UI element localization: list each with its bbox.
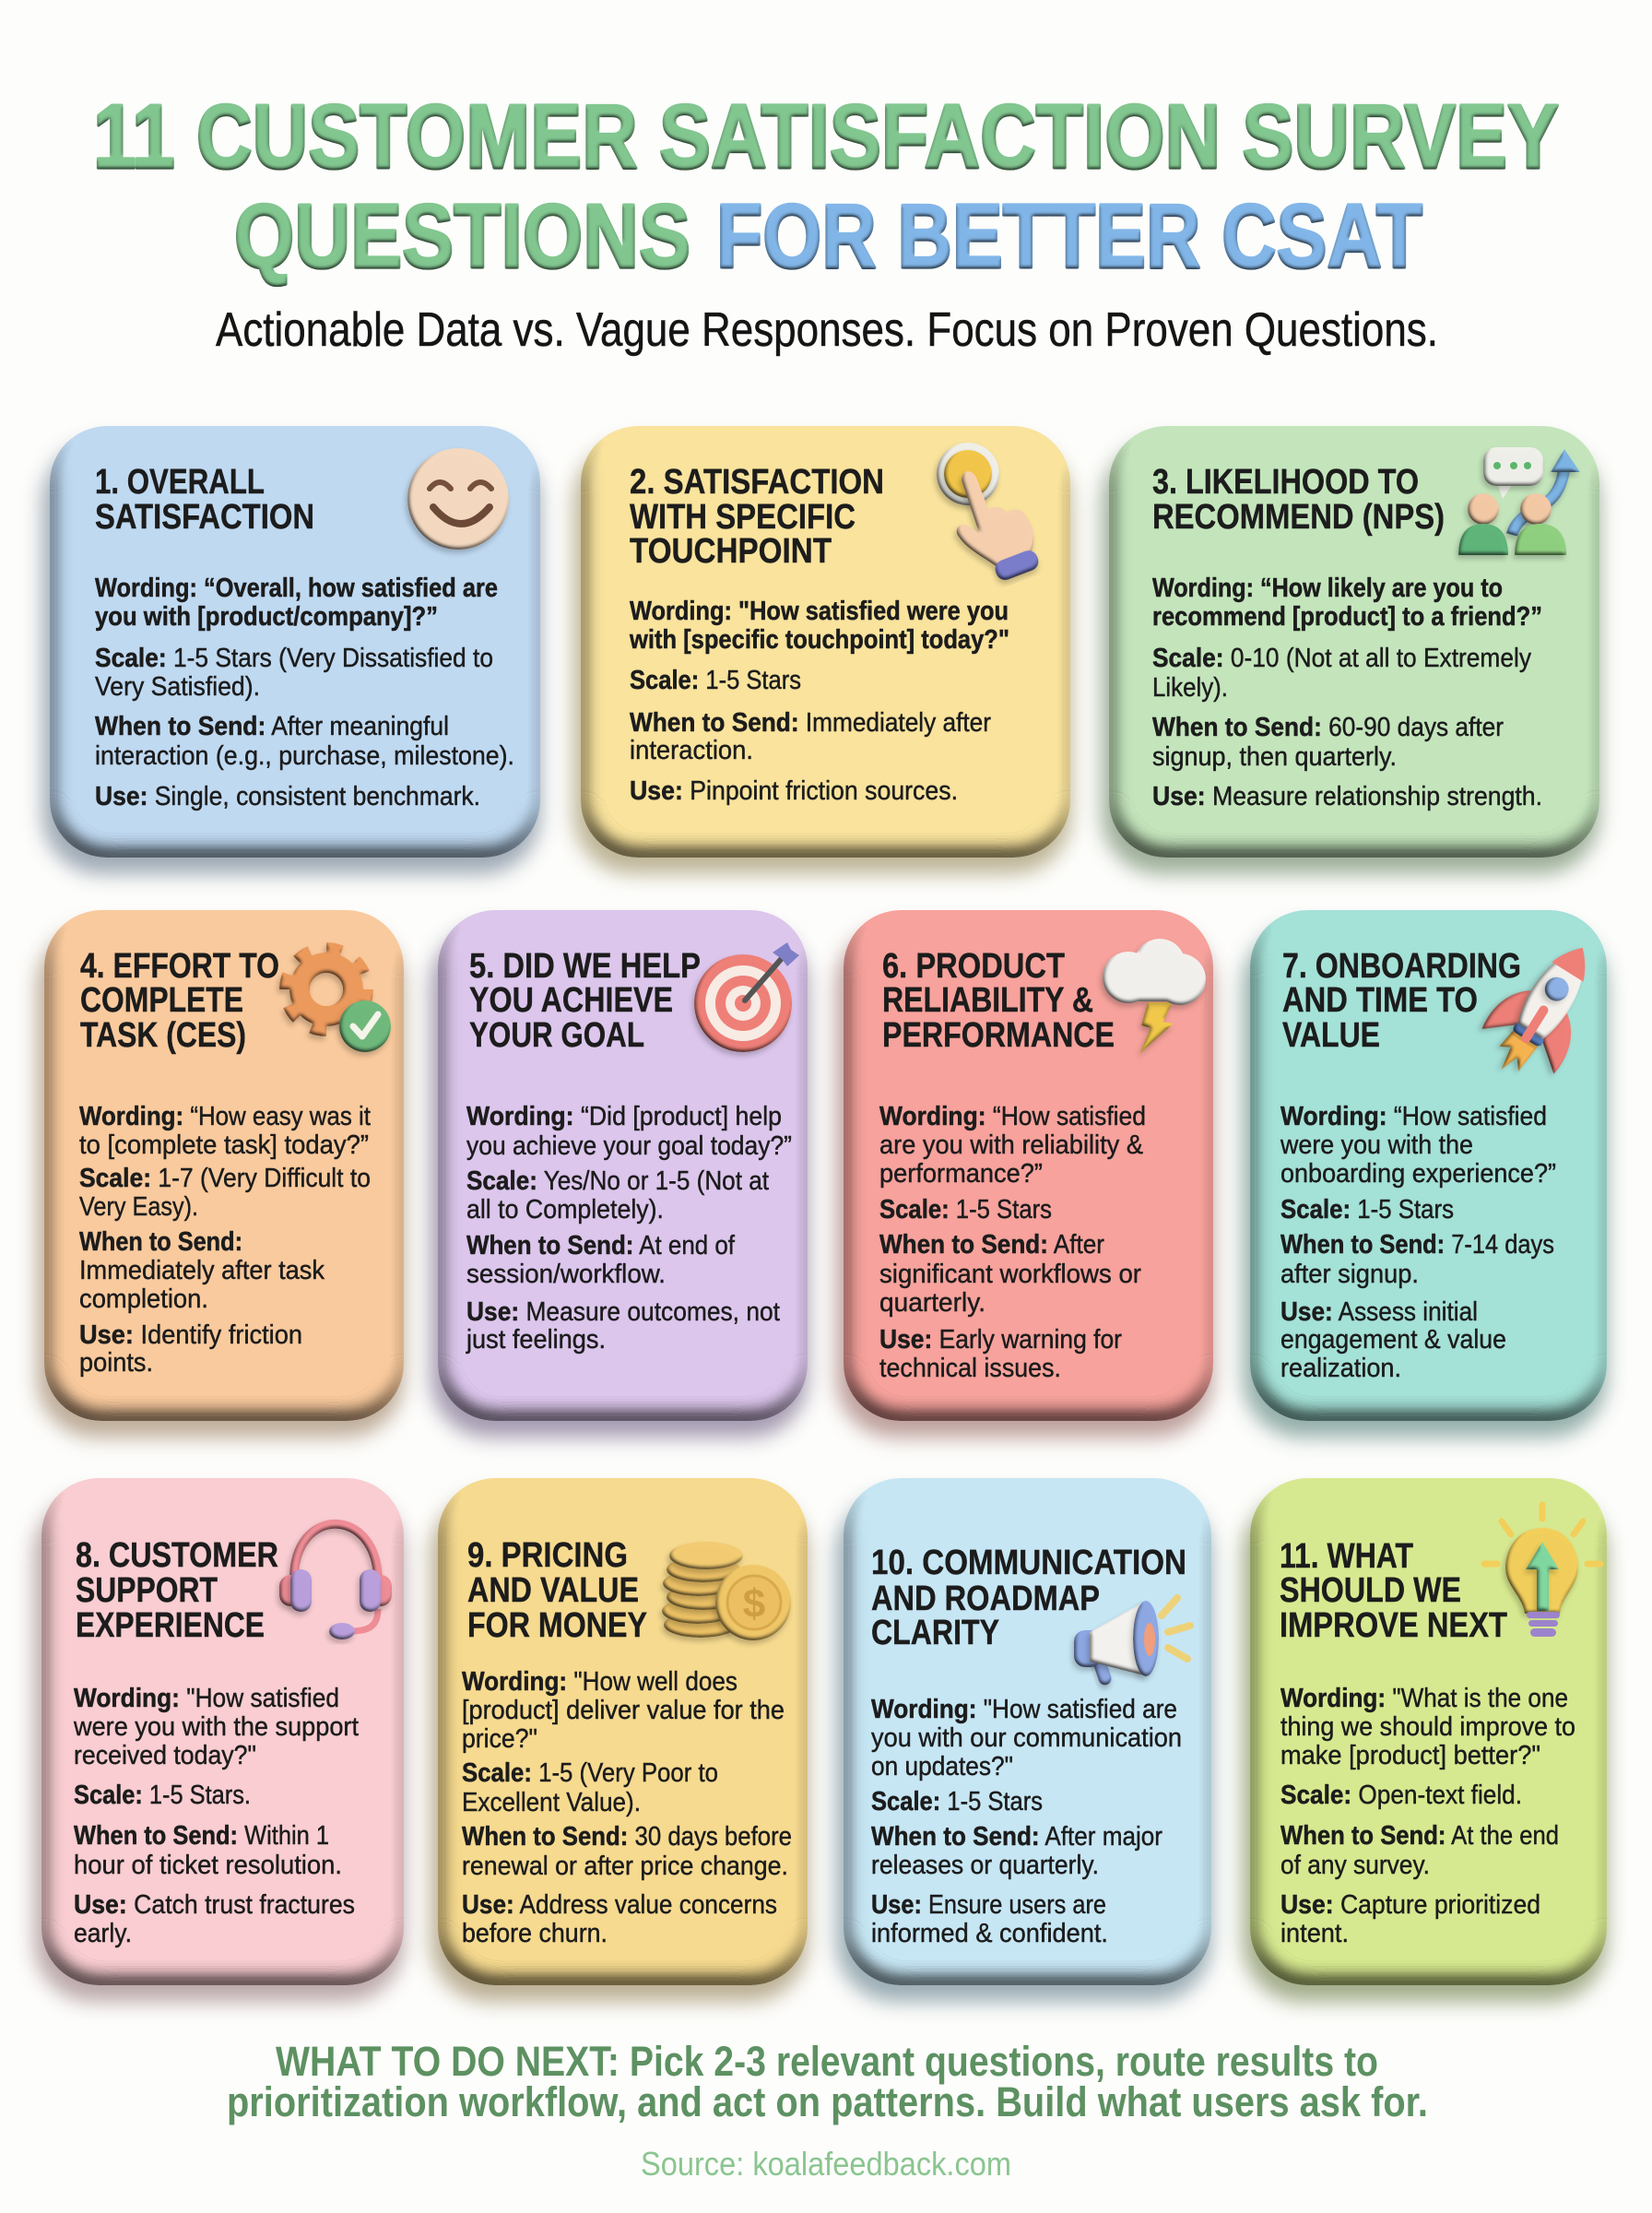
body text: When to Send: Immediately after xyxy=(630,708,991,738)
panel: 1. overall satisfaction xyxy=(42,426,540,874)
body text: Scale: 1-5 Stars xyxy=(879,1195,1052,1225)
call to action: WHAT TO DO NEXT: Pick 2-3 relevant questions, route results to xyxy=(276,2038,1378,2085)
body text: When to Send: At the end xyxy=(1280,1821,1559,1851)
panel: 8. customer support experience xyxy=(34,1478,404,2002)
body text: before churn. xyxy=(462,1919,608,1948)
icon: smiley xyxy=(407,448,509,550)
body text: make [product] better?" xyxy=(1280,1741,1540,1770)
body text: after signup. xyxy=(1280,1260,1419,1289)
body text xyxy=(73,1684,359,1948)
heading: 10. COMMUNICATION xyxy=(871,1544,1186,1582)
body text: Very Satisfied). xyxy=(95,672,260,702)
heading: 7. ONBOARDING xyxy=(1282,947,1521,986)
body text: Scale: Yes/No or 1-5 (Not at xyxy=(466,1166,769,1196)
heading: EXPERIENCE xyxy=(76,1606,265,1645)
heading: 11. WHAT xyxy=(1280,1537,1413,1576)
body text: points. xyxy=(79,1348,153,1378)
body text: Use: Capture prioritized xyxy=(1280,1890,1540,1920)
body text: Wording: “How likely are you to xyxy=(1152,574,1503,603)
title: QUESTIONS xyxy=(234,185,690,287)
panel: 10. communication and roadmap clarity xyxy=(836,1478,1211,2002)
subtitle: Actionable Data vs. Vague Responses. Focus on Proven Questions. xyxy=(216,303,1438,357)
heading xyxy=(80,947,279,1055)
body text: are you with reliability & xyxy=(879,1130,1143,1160)
body text: technical issues. xyxy=(879,1354,1061,1383)
body text: Scale: 1-5 Stars xyxy=(630,666,801,695)
heading xyxy=(467,1536,647,1645)
panel: 7. onboarding and time to value xyxy=(1243,910,1620,1438)
body text: Wording: “How satisfied xyxy=(879,1102,1146,1131)
heading xyxy=(871,1544,1186,1652)
panel: 2. satisfaction with specific touchpoint xyxy=(573,426,1071,874)
heading xyxy=(630,463,884,571)
panel: 5. did we help you achieve your goal xyxy=(431,910,808,1438)
icon: rocket xyxy=(1468,925,1620,1095)
body text: were you with the xyxy=(1280,1130,1473,1160)
body text: Immediately after task xyxy=(79,1256,325,1285)
heading: 5. DID WE HELP xyxy=(469,947,701,986)
body text xyxy=(629,597,1009,806)
body text: renewal or after price change. xyxy=(462,1852,788,1881)
heading xyxy=(882,947,1115,1055)
body text: When to Send: 7-14 days xyxy=(1280,1230,1554,1260)
body text: you with [product/company]?” xyxy=(95,602,438,632)
icon: gear with check xyxy=(285,948,391,1052)
body text: When to Send: After xyxy=(879,1230,1104,1260)
body text: Wording: “Overall, how satisfied are xyxy=(95,574,498,603)
title xyxy=(93,86,1559,287)
heading: 4. EFFORT TO xyxy=(80,947,279,986)
body text: When to Send: 60-90 days after xyxy=(1152,713,1504,742)
body text xyxy=(1280,1684,1575,1948)
body text: Wording: "How satisfied xyxy=(74,1684,339,1713)
heading: RELIABILITY & xyxy=(882,981,1093,1020)
heading: TASK (CES) xyxy=(80,1016,246,1055)
body text xyxy=(95,574,514,811)
icon: storm cloud xyxy=(1103,939,1206,1054)
body text xyxy=(879,1102,1146,1383)
body text: on updates?" xyxy=(871,1752,1013,1781)
title: FOR BETTER CSAT xyxy=(716,185,1422,287)
body text: performance?” xyxy=(879,1159,1043,1189)
heading: SUPPORT xyxy=(76,1571,218,1610)
heading: SHOULD WE xyxy=(1280,1571,1461,1610)
body text: Scale: Open-text field. xyxy=(1280,1781,1522,1810)
heading: VALUE xyxy=(1282,1016,1380,1055)
body text: Use: Address value concerns xyxy=(462,1890,777,1920)
body text: Use: Single, consistent benchmark. xyxy=(95,782,480,811)
heading xyxy=(95,463,314,537)
heading: IMPROVE NEXT xyxy=(1280,1606,1507,1645)
heading: 1. OVERALL xyxy=(95,463,265,502)
body text: completion. xyxy=(79,1284,208,1314)
panel: 9. pricing and value for money xyxy=(431,1478,808,2002)
heading: TOUCHPOINT xyxy=(630,532,832,571)
body text: with [specific touchpoint] today?" xyxy=(629,625,1009,655)
body text: hour of ticket resolution. xyxy=(74,1851,342,1880)
body text: intent. xyxy=(1280,1919,1349,1948)
body text: Excellent Value). xyxy=(462,1788,641,1817)
heading: AND VALUE xyxy=(467,1571,639,1610)
body text: Use: Catch trust fractures xyxy=(74,1890,355,1920)
heading xyxy=(1280,1537,1507,1645)
body text: Scale: 1-5 Stars. xyxy=(74,1781,251,1810)
body text: When to Send: After major xyxy=(871,1822,1162,1852)
body text: realization. xyxy=(1280,1354,1401,1383)
icon: headset xyxy=(279,1524,392,1639)
body text: Scale: 1-7 (Very Difficult to xyxy=(79,1164,371,1193)
body text: all to Completely). xyxy=(466,1195,664,1225)
icon: coins xyxy=(662,1542,791,1640)
body text: Scale: 1-5 Stars xyxy=(1280,1195,1454,1225)
body text: Use: Identify friction xyxy=(79,1320,302,1350)
heading xyxy=(469,947,701,1055)
icon: coins: $ xyxy=(743,1581,765,1627)
body text: Very Easy). xyxy=(79,1192,198,1222)
body text: onboarding experience?” xyxy=(1280,1159,1556,1189)
body text: interaction (e.g., purchase, milestone). xyxy=(95,741,514,771)
panel: 11. what should we improve next xyxy=(1243,1478,1607,2002)
body text: Wording: “Did [product] help xyxy=(466,1102,782,1131)
body text: Use: Early warning for xyxy=(879,1325,1122,1355)
body text xyxy=(1152,574,1542,811)
body text: quarterly. xyxy=(879,1288,985,1318)
body text xyxy=(871,1695,1182,1948)
panel: 6. product reliability and performance xyxy=(836,910,1213,1438)
body text: session/workflow. xyxy=(466,1260,666,1289)
source: Source: koalafeedback.com xyxy=(641,2145,1011,2183)
heading: CLARITY xyxy=(871,1614,999,1652)
body text: Use: Pinpoint friction sources. xyxy=(630,776,958,806)
body text: Scale: 1-5 Stars xyxy=(871,1787,1043,1817)
icon: megaphone xyxy=(1074,1598,1190,1686)
heading: SATISFACTION xyxy=(95,498,314,537)
body text: Wording: "How well does xyxy=(462,1667,738,1697)
body text: When to Send: At end of xyxy=(466,1231,735,1260)
heading: AND TIME TO xyxy=(1282,981,1478,1020)
heading: YOUR GOAL xyxy=(469,1016,644,1055)
heading: 3. LIKELIHOOD TO xyxy=(1152,463,1419,502)
body text: Use: Measure outcomes, not xyxy=(466,1297,780,1327)
heading: FOR MONEY xyxy=(467,1606,647,1645)
heading: WITH SPECIFIC xyxy=(630,498,856,537)
call to action xyxy=(227,2038,1428,2125)
body text: to [complete task] today?” xyxy=(79,1130,369,1160)
heading: 6. PRODUCT xyxy=(882,947,1065,986)
panel: 4. effort to complete task xyxy=(37,910,404,1438)
body text xyxy=(79,1102,371,1378)
heading xyxy=(76,1536,278,1645)
body text: When to Send: After meaningful xyxy=(95,712,449,741)
body text: Likely). xyxy=(1152,673,1228,703)
heading: RECOMMEND (NPS) xyxy=(1152,498,1445,537)
body text: releases or quarterly. xyxy=(871,1851,1099,1880)
heading: AND ROADMAP xyxy=(871,1580,1100,1618)
body text: Wording: “How satisfied xyxy=(1280,1102,1547,1131)
body text: early. xyxy=(74,1919,132,1948)
body text: were you with the support xyxy=(73,1712,359,1742)
body text: When to Send: xyxy=(79,1227,242,1257)
heading: PERFORMANCE xyxy=(882,1016,1115,1055)
body text: interaction. xyxy=(630,736,753,765)
body text: Scale: 0-10 (Not at all to Extremely xyxy=(1152,644,1532,673)
body text xyxy=(1280,1102,1556,1383)
body text: Use: Assess initial xyxy=(1280,1297,1478,1327)
body text: Use: Measure relationship strength. xyxy=(1152,782,1542,811)
body text: Wording: "How satisfied were you xyxy=(630,597,1009,626)
body text xyxy=(462,1667,792,1948)
body text: Scale: 1-5 Stars (Very Dissatisfied to xyxy=(95,644,493,673)
icon: light bulb with arrow xyxy=(1484,1505,1600,1637)
icon: target with arrow xyxy=(694,942,799,1052)
body text: signup, then quarterly. xyxy=(1152,742,1397,772)
body text xyxy=(466,1102,792,1355)
body text: of any survey. xyxy=(1280,1851,1430,1880)
body text: Wording: "How satisfied are xyxy=(871,1695,1177,1724)
icon: finger pressing button xyxy=(937,443,1041,583)
heading xyxy=(1282,947,1521,1055)
body text: significant workflows or xyxy=(879,1260,1141,1289)
heading: COMPLETE xyxy=(80,981,243,1020)
body text: When to Send: 30 days before xyxy=(462,1822,792,1852)
body text: engagement & value xyxy=(1280,1325,1506,1355)
panel: 3. likelihood to recommend xyxy=(1102,426,1599,874)
heading: YOU ACHIEVE xyxy=(469,981,673,1020)
heading: 9. PRICING xyxy=(467,1536,628,1575)
body text: Use: Ensure users are xyxy=(871,1890,1106,1920)
heading: 8. CUSTOMER xyxy=(76,1536,278,1575)
body text: thing we should improve to xyxy=(1280,1712,1575,1742)
body text: Scale: 1-5 (Very Poor to xyxy=(462,1758,718,1788)
heading xyxy=(1152,463,1445,537)
body text: you achieve your goal today?” xyxy=(466,1131,792,1161)
heading: 2. SATISFACTION xyxy=(630,463,884,502)
body text: received today?" xyxy=(74,1741,256,1770)
body text: Wording: “How easy was it xyxy=(79,1102,371,1131)
body text: Wording: "What is the one xyxy=(1280,1684,1568,1713)
body text: [product] deliver value for the xyxy=(462,1696,785,1725)
body text: you with our communication xyxy=(871,1723,1182,1753)
call to action: prioritization workflow, and act on patterns. Build what users ask for. xyxy=(227,2078,1428,2125)
body text: recommend [product] to a friend?” xyxy=(1152,602,1542,632)
body text: just feelings. xyxy=(466,1325,606,1355)
body text: price?" xyxy=(462,1724,537,1754)
icon: people and recommendation xyxy=(1458,447,1580,555)
body text: informed & confident. xyxy=(871,1919,1108,1948)
body text: When to Send: Within 1 xyxy=(74,1821,329,1851)
